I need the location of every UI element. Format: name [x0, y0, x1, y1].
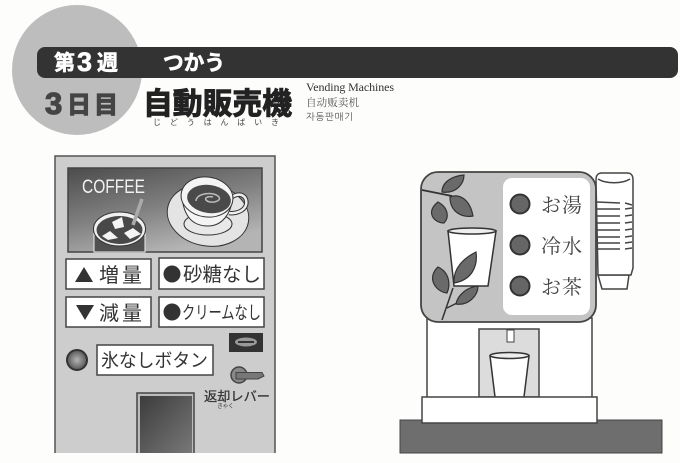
button: no sugar: 砂糖なし	[183, 264, 261, 286]
day label: 目	[94, 92, 118, 119]
theme label: つかう	[163, 52, 225, 75]
cup in recess	[490, 352, 529, 397]
icon: iced coffee	[94, 199, 146, 252]
title reading: じどうはんばいき	[153, 118, 279, 127]
button: no ice	[97, 345, 213, 375]
coin slot	[229, 333, 263, 352]
illustrated cup	[448, 228, 496, 286]
nozzle	[507, 330, 514, 342]
coffee vending machine	[55, 156, 275, 453]
tea leaves bottom	[433, 252, 478, 320]
dispenser head	[421, 172, 596, 322]
button: increase: 増量	[99, 264, 142, 287]
selector: hot water	[510, 194, 582, 217]
selector: tea: お茶	[541, 276, 582, 299]
header circle	[12, 5, 142, 135]
day label: 日	[67, 92, 91, 119]
header bar	[37, 47, 678, 78]
counter	[400, 420, 662, 453]
selector: hot water: お湯	[541, 194, 582, 217]
week label: 3	[77, 47, 92, 77]
button: decrease: 減量	[99, 302, 142, 325]
cup recess	[479, 329, 539, 397]
translation: Korean: 자동판매기	[306, 112, 353, 123]
translation: Chinese: 自动贩卖机	[306, 96, 360, 109]
week label: 第	[54, 52, 75, 75]
dispensing door	[137, 393, 194, 453]
return lever label: 返却レバー	[204, 389, 270, 404]
return lever reading: きゃく	[217, 403, 234, 410]
cup stack holder	[596, 173, 633, 289]
title: vending machine: 自動販売機	[143, 88, 292, 121]
selector: cold water	[510, 235, 582, 258]
button: decrease	[66, 297, 151, 327]
selector: cold water: 冷水	[541, 235, 582, 258]
button: no ice: 氷なしボタン	[101, 350, 208, 371]
button: increase	[66, 259, 151, 289]
coffee display panel	[68, 168, 262, 253]
translation: English: Vending Machines	[306, 80, 394, 94]
water dispenser	[421, 172, 633, 423]
selector: tea	[510, 276, 582, 299]
button: no cream	[159, 297, 264, 327]
machine body	[55, 156, 275, 453]
day label: 3	[45, 86, 62, 121]
control panel	[503, 178, 590, 315]
button: no sugar	[159, 258, 264, 289]
indicator lamp	[67, 350, 87, 370]
return lever	[231, 367, 264, 383]
dispenser body	[427, 318, 592, 398]
icon: hot coffee cup	[162, 174, 254, 253]
button: no cream: クリームなし	[182, 303, 261, 323]
week label: 週	[97, 52, 118, 75]
base tray	[422, 397, 597, 423]
tea leaves top	[422, 175, 473, 223]
coffee text: COFFEE	[82, 177, 145, 198]
